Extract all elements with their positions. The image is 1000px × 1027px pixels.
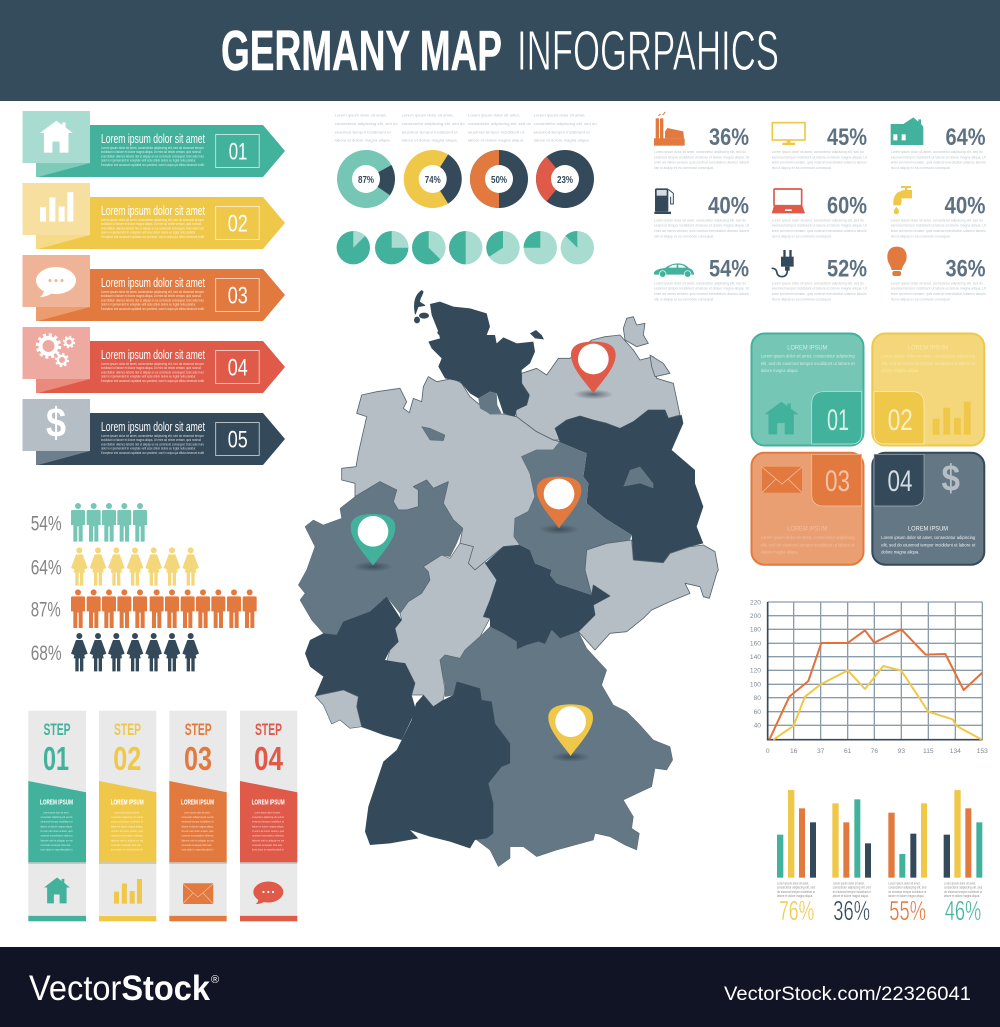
box 01: LOREM IPSUM [787, 346, 827, 352]
banner 02 [22, 183, 285, 249]
bar group 76%: Lorem ipsum dolor sit amet, [777, 882, 809, 886]
donut captions: eiusmod tempor incididunt ut [534, 129, 591, 134]
x axis labels: 93 [898, 748, 905, 755]
donut captions: consectetur adipiscing elit, sed do [335, 121, 399, 126]
step 03: Lorem ipsum dolor sit amet, [184, 810, 210, 814]
step 02: 02 [113, 740, 141, 777]
stat captions: nisi ut aliquip ex ea commodo consequat. [654, 296, 714, 301]
stat captions: eiusmod tempor incididunt ut labore et dolore magna aliqua. Ut [772, 154, 867, 159]
stat captions: enim ad minim veniam, quis nostrud exercitation ullamco laboris [772, 228, 867, 233]
step 04: nostrud exercitation ullamco [252, 834, 284, 838]
icon: light bulb [887, 247, 907, 276]
title: INFOGRPAHICS [517, 19, 779, 83]
stat numbers: 36% [709, 124, 749, 151]
box 03: dolore magna aliqua. [761, 550, 799, 554]
stat captions: nisi ut aliquip ex ea commodo consequat. [772, 233, 832, 238]
step 01: laboris nisi ut aliquip ex ea [40, 838, 73, 842]
icon: speech bubble [253, 882, 283, 904]
grouped bar charts with percentages [777, 790, 982, 926]
x axis labels: 115 [923, 748, 934, 755]
map pin: orange [537, 477, 581, 534]
stat captions: enim ad minim veniam, quis nostrud exercitation ullamco laboris [654, 228, 749, 233]
step 01: STEP [44, 721, 70, 739]
state: Rhineland-Palatinate [305, 597, 416, 740]
chart axes [768, 602, 982, 740]
state: Hamburg [478, 392, 502, 414]
stat captions: Lorem ipsum dolor sit amet, consectetur adipiscing elit, sed do [772, 281, 864, 286]
stat captions: Lorem ipsum dolor sit amet, consectetur adipiscing elit, sed do [772, 217, 864, 222]
state: Mecklenburg-Vorpommern [515, 317, 680, 440]
donut 50%: 50% [491, 175, 507, 186]
banner 04: exercitation ullamco laboris nisi ut aliquip ex ea commodo consequat. Duis aute irure [101, 370, 204, 374]
state: Bremen [422, 427, 445, 441]
step 01: nostrud exercitation ullamco [40, 834, 73, 838]
banner 03 [22, 255, 285, 321]
step 03: eiusmod tempor incididunt ut [182, 820, 214, 824]
icon: speech bubble [36, 267, 76, 297]
y axis labels [750, 599, 761, 730]
bar group 55%: Lorem ipsum dolor sit amet, [888, 882, 920, 886]
bar group 46%: Lorem ipsum dolor sit amet, [944, 882, 976, 886]
bar group 55%: consectetur adipiscing elit, sed [888, 886, 926, 890]
stat captions: nisi ut aliquip ex ea commodo consequat. [654, 165, 714, 170]
donut 87% [337, 150, 395, 208]
stat captions: Lorem ipsum dolor sit amet, consectetur adipiscing elit, sed do [654, 217, 747, 222]
stat captions: eiusmod tempor incididunt ut labore et dolore magna aliqua. Ut [654, 154, 750, 159]
donut captions: Lorem ipsum dolor sit amet, [402, 113, 454, 118]
bar group 55%: 55% [889, 895, 926, 926]
donut 50% [470, 150, 528, 208]
bar group 36%: consectetur adipiscing elit, sed [833, 886, 871, 890]
bar group 46%: consectetur adipiscing elit, sed [944, 886, 982, 890]
stat numbers: 60% [827, 192, 867, 219]
box 02: dolore magna aliqua. [881, 368, 919, 373]
step 02: commodo consequat. Duis aute [111, 843, 141, 847]
x axis labels: 76 [871, 748, 878, 755]
banner 01 [22, 111, 285, 177]
y axis labels: 140 [750, 654, 761, 661]
banner 04: Lorem ipsum dolor sit amet, consectetur adipiscing elit, sed do eiusmod tempor [101, 362, 205, 366]
state: Baden-Wurttemberg [365, 682, 510, 848]
step 04: consectetur adipiscing elit, sed do [252, 815, 284, 819]
stat numbers: 64% [946, 124, 986, 151]
box 04: LOREM IPSUM [908, 526, 948, 532]
box 03 [752, 453, 864, 565]
box 02: LOREM IPSUM [908, 346, 948, 352]
box 04: 04 [888, 465, 912, 498]
step 03: consectetur adipiscing elit, sed do [182, 815, 214, 819]
x axis labels [766, 748, 988, 755]
step 01: LOREM IPSUM [40, 797, 73, 806]
banner 01: Lorem ipsum dolor sit amet [101, 131, 205, 146]
panel: statistic grid with icons [654, 112, 986, 301]
banner 01: exercitation ullamco laboris nisi ut aliquip ex ea commodo consequat. Duis aute irure [101, 154, 204, 158]
series: yellow line [773, 666, 982, 740]
stat captions: eiusmod tempor incididunt ut labore et dolore magna aliqua. Ut [891, 286, 986, 291]
step 04 [240, 711, 297, 921]
banner 05: Lorem ipsum dolor sit amet, consectetur adipiscing elit, sed do eiusmod tempor [101, 434, 205, 438]
title: GERMANY MAP [221, 19, 502, 83]
y axis labels: 100 [750, 682, 761, 689]
step 03 [169, 711, 227, 921]
y axis labels: 200 [750, 613, 761, 620]
step 03: laboris nisi ut aliquip ex ea [182, 838, 214, 842]
step 02: nostrud exercitation ullamco [111, 834, 143, 838]
bar group 46%: do eiusmod tempor incididunt ut [944, 890, 982, 894]
banner 01: 01 [229, 138, 247, 166]
banner 03: incididunt ut labore et dolore magna aliqua. Ut enim ad minim veniam, quis nostrud [101, 294, 201, 298]
state: Saarland [315, 690, 362, 728]
step 02: Lorem ipsum dolor sit amet, [114, 810, 140, 814]
state: Saxony-Anhalt [514, 442, 632, 595]
icon: car [654, 263, 694, 277]
donut captions: eiusmod tempor incididunt ut [402, 129, 459, 134]
banner 02: 02 [228, 210, 248, 238]
stat captions: enim ad minim veniam, quis nostrud exercitation ullamco laboris [654, 160, 749, 165]
bar group 36%: labore et dolore magna aliqua. [833, 894, 869, 898]
box 01 [752, 334, 864, 446]
bar group 36%: Lorem ipsum dolor sit amet, [833, 882, 865, 886]
box 02: Lorem ipsum dolor sit amet, consectetur adipiscing [881, 354, 976, 358]
people row 64% [31, 547, 199, 586]
banner 05: dolor in reprehenderit in voluptate velit esse cillum dolore eu fugiat nulla pariatur. [101, 447, 196, 451]
step 04: eiusmod tempor incididunt ut [252, 820, 284, 824]
step 01: Ut enim ad minim veniam, quis [40, 829, 73, 833]
step 02 [99, 711, 156, 921]
step 03: commodo consequat. Duis aute [182, 843, 212, 847]
banner 04: 04 [228, 354, 248, 382]
state: Hesse [387, 543, 497, 707]
state: North Rhine-Westphalia [298, 480, 463, 635]
map pin: yellow [548, 704, 593, 762]
x axis labels: 153 [977, 748, 988, 755]
state: Lower Saxony [342, 377, 560, 570]
state: Bavaria [440, 627, 673, 867]
banner 05: exercitation ullamco laboris nisi ut aliquip ex ea commodo consequat. Duis aute irure [101, 442, 204, 446]
box 03: LOREM IPSUM [787, 526, 827, 532]
step 03: irure dolor in reprehenderit in [182, 848, 214, 852]
banner 05 [22, 399, 285, 465]
registered mark: ® [211, 974, 219, 986]
box 04: dolore magna aliqua. [881, 550, 919, 554]
banner 02: Excepteur sint occaecat cupidatat non proident, sunt in culpa qui officia deserunt mollit [101, 235, 204, 239]
stat captions: enim ad minim veniam, quis nostrud exercitation ullamco laboris [772, 291, 867, 296]
step 01: commodo consequat. Duis aute [40, 843, 71, 847]
stat captions: eiusmod tempor incididunt ut labore et dolore magna aliqua. Ut [772, 286, 867, 291]
donut captions: labore et dolore magna aliqua. [534, 138, 590, 142]
state: Thuringia [483, 545, 610, 649]
stat numbers: 54% [709, 256, 749, 283]
stat captions: eiusmod tempor incididunt ut labore et dolore magna aliqua. Ut [891, 154, 986, 159]
stat captions: nisi ut aliquip ex ea commodo consequat. [891, 233, 951, 238]
bar group 36%: 36% [833, 895, 870, 926]
donut 74%: 74% [425, 175, 441, 186]
state: Brandenburg [555, 410, 703, 563]
step 02: eiusmod tempor incididunt ut [111, 820, 143, 824]
box 01: dolore magna aliqua. [761, 368, 799, 373]
step 02: STEP [114, 721, 141, 739]
stat captions: eiusmod tempor incididunt ut labore et dolore magna aliqua. Ut [654, 223, 750, 228]
stat captions: Lorem ipsum dolor sit amet, consectetur adipiscing elit, sed do [891, 281, 983, 286]
banner 03: exercitation ullamco laboris nisi ut aliquip ex ea commodo consequat. Duis aute irure [101, 298, 204, 302]
line chart [750, 599, 988, 755]
stat captions: nisi ut aliquip ex ea commodo consequat. [772, 296, 832, 301]
stat numbers: 40% [944, 192, 986, 219]
donut captions: Lorem ipsum dolor sit amet, [335, 113, 387, 118]
box 03: elit, sed do eiusmod tempor incididunt ut labore et [761, 542, 855, 547]
box 03: 03 [825, 465, 850, 498]
footer logo: VectorStock [29, 969, 210, 1008]
banner 05: 05 [228, 426, 248, 454]
step 02: LOREM IPSUM [111, 797, 144, 806]
bar group 76%: labore et dolore magna aliqua. [777, 894, 813, 898]
stat captions: eiusmod tempor incididunt ut labore et dolore magna aliqua. Ut [772, 223, 867, 228]
stat captions: enim ad minim veniam, quis nostrud exercitation ullamco laboris [654, 291, 749, 296]
stat captions: Lorem ipsum dolor sit amet, consectetur adipiscing elit, sed do [891, 149, 983, 154]
panel: row of small pie charts [337, 231, 594, 264]
icon: laptop [772, 189, 805, 213]
step 04: labore et dolore magna aliqua. [252, 824, 284, 828]
stat numbers: 40% [708, 192, 749, 219]
banner 04 [22, 327, 285, 393]
box 02: elit, sed do eiusmod tempor incididunt ut labore et [881, 361, 976, 366]
step 02: laboris nisi ut aliquip ex ea [111, 838, 143, 842]
donut captions: Lorem ipsum dolor sit amet, [468, 113, 520, 118]
banner 02: Lorem ipsum dolor sit amet [101, 203, 205, 218]
banner 03: Lorem ipsum dolor sit amet, consectetur adipiscing elit, sed do eiusmod tempor [101, 290, 205, 294]
step 04: irure dolor in reprehenderit in [252, 848, 284, 852]
people row 68%: 68% [31, 642, 62, 665]
banner 03: Lorem ipsum dolor sit amet [101, 275, 205, 290]
stat captions: Lorem ipsum dolor sit amet, consectetur adipiscing elit, sed do [654, 149, 747, 154]
step 04: LOREM IPSUM [252, 797, 285, 806]
bar group 36%: do eiusmod tempor incididunt ut [833, 890, 871, 894]
panel: step columns [28, 711, 297, 921]
banner 03: 03 [228, 282, 248, 310]
icon: monitor [772, 123, 805, 145]
step 02: consectetur adipiscing elit, sed do [111, 815, 143, 819]
step 04: STEP [255, 721, 282, 739]
banner 05: incididunt ut labore et dolore magna aliqua. Ut enim ad minim veniam, quis nostrud [101, 438, 201, 442]
bar group 76%: do eiusmod tempor incididunt ut [777, 890, 815, 894]
step 01 [28, 711, 86, 921]
banner 01: incididunt ut labore et dolore magna aliqua. Ut enim ad minim veniam, quis nostrud [101, 150, 201, 154]
box 02 [872, 334, 984, 446]
stat captions [654, 149, 986, 301]
donut captions: labore et dolore magna aliqua. [468, 138, 524, 142]
people row 54%: 54% [31, 513, 62, 536]
icon: water tap [893, 186, 912, 214]
banner 05: Excepteur sint occaecat cupidatat non proident, sunt in culpa qui officia deserunt mollit [101, 451, 204, 455]
donut 23% [536, 150, 594, 208]
step 01: consectetur adipiscing elit, sed do [40, 815, 73, 819]
box 04: elit, sed do eiusmod tempor incididunt ut labore et [881, 542, 976, 547]
step 03: labore et dolore magna aliqua. [182, 824, 214, 828]
step 03: STEP [185, 721, 212, 739]
stat captions: Lorem ipsum dolor sit amet, consectetur adipiscing elit, sed do [891, 217, 983, 222]
footer url: VectorStock.com/22326041 [724, 984, 971, 1005]
box 03: Lorem ipsum dolor sit amet, consectetur adipiscing [761, 535, 855, 540]
banner 05: Lorem ipsum dolor sit amet [101, 419, 205, 434]
map pin: red [571, 342, 616, 399]
state: Schleswig-Holstein [414, 291, 544, 417]
step 04: laboris nisi ut aliquip ex ea [252, 838, 284, 842]
step 03: nostrud exercitation ullamco [182, 834, 214, 838]
map pin: teal [351, 514, 395, 572]
stat numbers [708, 124, 986, 283]
panel: donut charts with captions [335, 113, 598, 208]
box 04 [872, 453, 984, 565]
panel: people pictograms [31, 503, 257, 671]
banner 04: dolor in reprehenderit in voluptate velit esse cillum dolore eu fugiat nulla pariatur. [101, 375, 196, 379]
icon: gears [38, 335, 74, 366]
donut 74% [404, 150, 462, 208]
x axis labels: 16 [790, 748, 798, 755]
bar group 55%: do eiusmod tempor incididunt ut [888, 890, 926, 894]
step 03: Ut enim ad minim veniam, quis [182, 829, 214, 833]
step 02: Ut enim ad minim veniam, quis [111, 829, 143, 833]
x axis labels: 61 [844, 748, 852, 755]
banner 03: Excepteur sint occaecat cupidatat non proident, sunt in culpa qui officia deserunt mollit [101, 307, 204, 311]
people row 68% [31, 633, 199, 671]
banner 02: exercitation ullamco laboris nisi ut aliquip ex ea commodo consequat. Duis aute irure [101, 226, 204, 230]
banner 04: Lorem ipsum dolor sit amet [101, 347, 205, 362]
header band [0, 0, 1000, 101]
series: orange line [769, 629, 982, 740]
x axis labels: 0 [766, 748, 770, 755]
stat captions: nisi ut aliquip ex ea commodo consequat. [772, 165, 832, 170]
icon: envelope [762, 467, 802, 493]
stat captions: nisi ut aliquip ex ea commodo consequat. [891, 296, 951, 301]
icon: factory [654, 112, 685, 146]
panel: numbered arrow banners [22, 111, 285, 465]
panel: four rounded info boxes [752, 334, 984, 565]
y axis labels: 80 [754, 695, 761, 702]
step 01: Lorem ipsum dolor sit amet, [43, 810, 69, 814]
donut captions: eiusmod tempor incididunt ut [468, 129, 525, 134]
bar group 76%: consectetur adipiscing elit, sed [777, 886, 815, 890]
icon: fuel pump [654, 188, 673, 214]
bar group 46% [944, 790, 982, 926]
footer band [0, 947, 1000, 1027]
stat numbers: 36% [946, 256, 986, 283]
people row 54% [31, 503, 147, 542]
stat captions: nisi ut aliquip ex ea commodo consequat. [891, 165, 951, 170]
stat numbers: 45% [827, 124, 867, 151]
y axis labels: 60 [754, 709, 761, 716]
icon: house [891, 117, 923, 145]
donut captions: labore et dolore magna aliqua. [335, 138, 391, 142]
banner 05: $ [46, 399, 66, 446]
stat captions: nisi ut aliquip ex ea commodo consequat. [654, 233, 714, 238]
banner 04: Excepteur sint occaecat cupidatat non proident, sunt in culpa qui officia deserunt mollit [101, 379, 204, 383]
step 04: 04 [254, 740, 284, 777]
state: Saxony [578, 540, 718, 650]
banner 04: incididunt ut labore et dolore magna aliqua. Ut enim ad minim veniam, quis nostrud [101, 366, 201, 370]
step 03: LOREM IPSUM [181, 797, 214, 806]
step 01: labore et dolore magna aliqua. [40, 824, 73, 828]
state: Berlin [623, 467, 653, 488]
banner 02: Lorem ipsum dolor sit amet, consectetur adipiscing elit, sed do eiusmod tempor [101, 218, 205, 222]
stat captions: eiusmod tempor incididunt ut labore et dolore magna aliqua. Ut [654, 286, 750, 291]
bar group 76%: 76% [779, 895, 814, 926]
bar group 46%: labore et dolore magna aliqua. [944, 894, 980, 898]
banner 01: Lorem ipsum dolor sit amet, consectetur adipiscing elit, sed do eiusmod tempor [101, 146, 205, 150]
bar group 36% [832, 799, 871, 926]
banner 02: dolor in reprehenderit in voluptate velit esse cillum dolore eu fugiat nulla pariatur. [101, 231, 196, 235]
donut captions: Lorem ipsum dolor sit amet, [534, 113, 586, 118]
box 02: 02 [888, 404, 913, 437]
step 03: 03 [184, 740, 212, 777]
step 04: commodo consequat. Duis aute [252, 843, 282, 847]
bar group 46%: 46% [945, 895, 981, 926]
donut captions: eiusmod tempor incididunt ut [335, 129, 392, 134]
bar group 55%: labore et dolore magna aliqua. [888, 894, 924, 898]
box 01: elit, sed do eiusmod tempor incididunt ut labore et [761, 361, 855, 366]
donut 87%: 87% [358, 175, 374, 186]
banner 02: incididunt ut labore et dolore magna aliqua. Ut enim ad minim veniam, quis nostrud [101, 222, 201, 226]
stat captions: Lorem ipsum dolor sit amet, consectetur adipiscing elit, sed do [654, 281, 747, 286]
map of Germany [298, 291, 718, 867]
x axis labels: 37 [817, 748, 825, 755]
chart grid [768, 602, 982, 740]
banner 01: Excepteur sint occaecat cupidatat non proident, sunt in culpa qui officia deserunt mollit [101, 163, 204, 167]
y axis labels: 160 [750, 641, 761, 648]
step 04: Lorem ipsum dolor sit amet, [254, 810, 281, 814]
y axis labels: 120 [750, 668, 761, 675]
x axis labels: 134 [950, 748, 961, 755]
box 04: $ [942, 458, 960, 498]
stat captions: Lorem ipsum dolor sit amet, consectetur adipiscing elit, sed do [772, 149, 864, 154]
bar group 55% [888, 803, 927, 926]
people row 64%: 64% [31, 556, 62, 579]
step 02: irure dolor in reprehenderit in [111, 848, 143, 852]
box 01: 01 [827, 404, 849, 437]
box 04: Lorem ipsum dolor sit amet, consectetur adipiscing [881, 535, 976, 540]
y axis labels: 40 [754, 723, 761, 730]
y axis labels: 220 [750, 599, 761, 606]
box 01: Lorem ipsum dolor sit amet, consectetur adipiscing [761, 354, 855, 358]
step 04: Ut enim ad minim veniam, quis [252, 829, 284, 833]
donut captions: consectetur adipiscing elit, sed do [534, 121, 598, 126]
step 01: eiusmod tempor incididunt ut [40, 820, 73, 824]
banner 01: dolor in reprehenderit in voluptate velit esse cillum dolore eu fugiat nulla pariatur. [101, 159, 196, 163]
stat captions: enim ad minim veniam, quis nostrud exercitation ullamco laboris [772, 160, 867, 165]
donut captions: consectetur adipiscing elit, sed do [402, 121, 466, 126]
stat numbers: 52% [827, 256, 867, 283]
icon: envelope [183, 883, 213, 904]
icon: power plug [772, 250, 794, 277]
banner 03: dolor in reprehenderit in voluptate velit esse cillum dolore eu fugiat nulla pariatur. [101, 303, 196, 307]
y axis labels: 180 [750, 627, 761, 634]
stat captions: eiusmod tempor incididunt ut labore et dolore magna aliqua. Ut [891, 223, 986, 228]
step 01: 01 [43, 740, 69, 777]
stat icons [654, 112, 923, 277]
bar group 76% [777, 790, 816, 926]
step 01: irure dolor in reprehenderit in [40, 848, 73, 852]
people row 87%: 87% [31, 599, 61, 622]
donut captions [335, 113, 598, 142]
donut captions: consectetur adipiscing elit, sed do [468, 121, 532, 126]
step 02: labore et dolore magna aliqua. [111, 824, 143, 828]
donut captions: labore et dolore magna aliqua. [402, 138, 458, 142]
people row 87% [31, 589, 257, 628]
donut 23%: 23% [557, 175, 573, 186]
